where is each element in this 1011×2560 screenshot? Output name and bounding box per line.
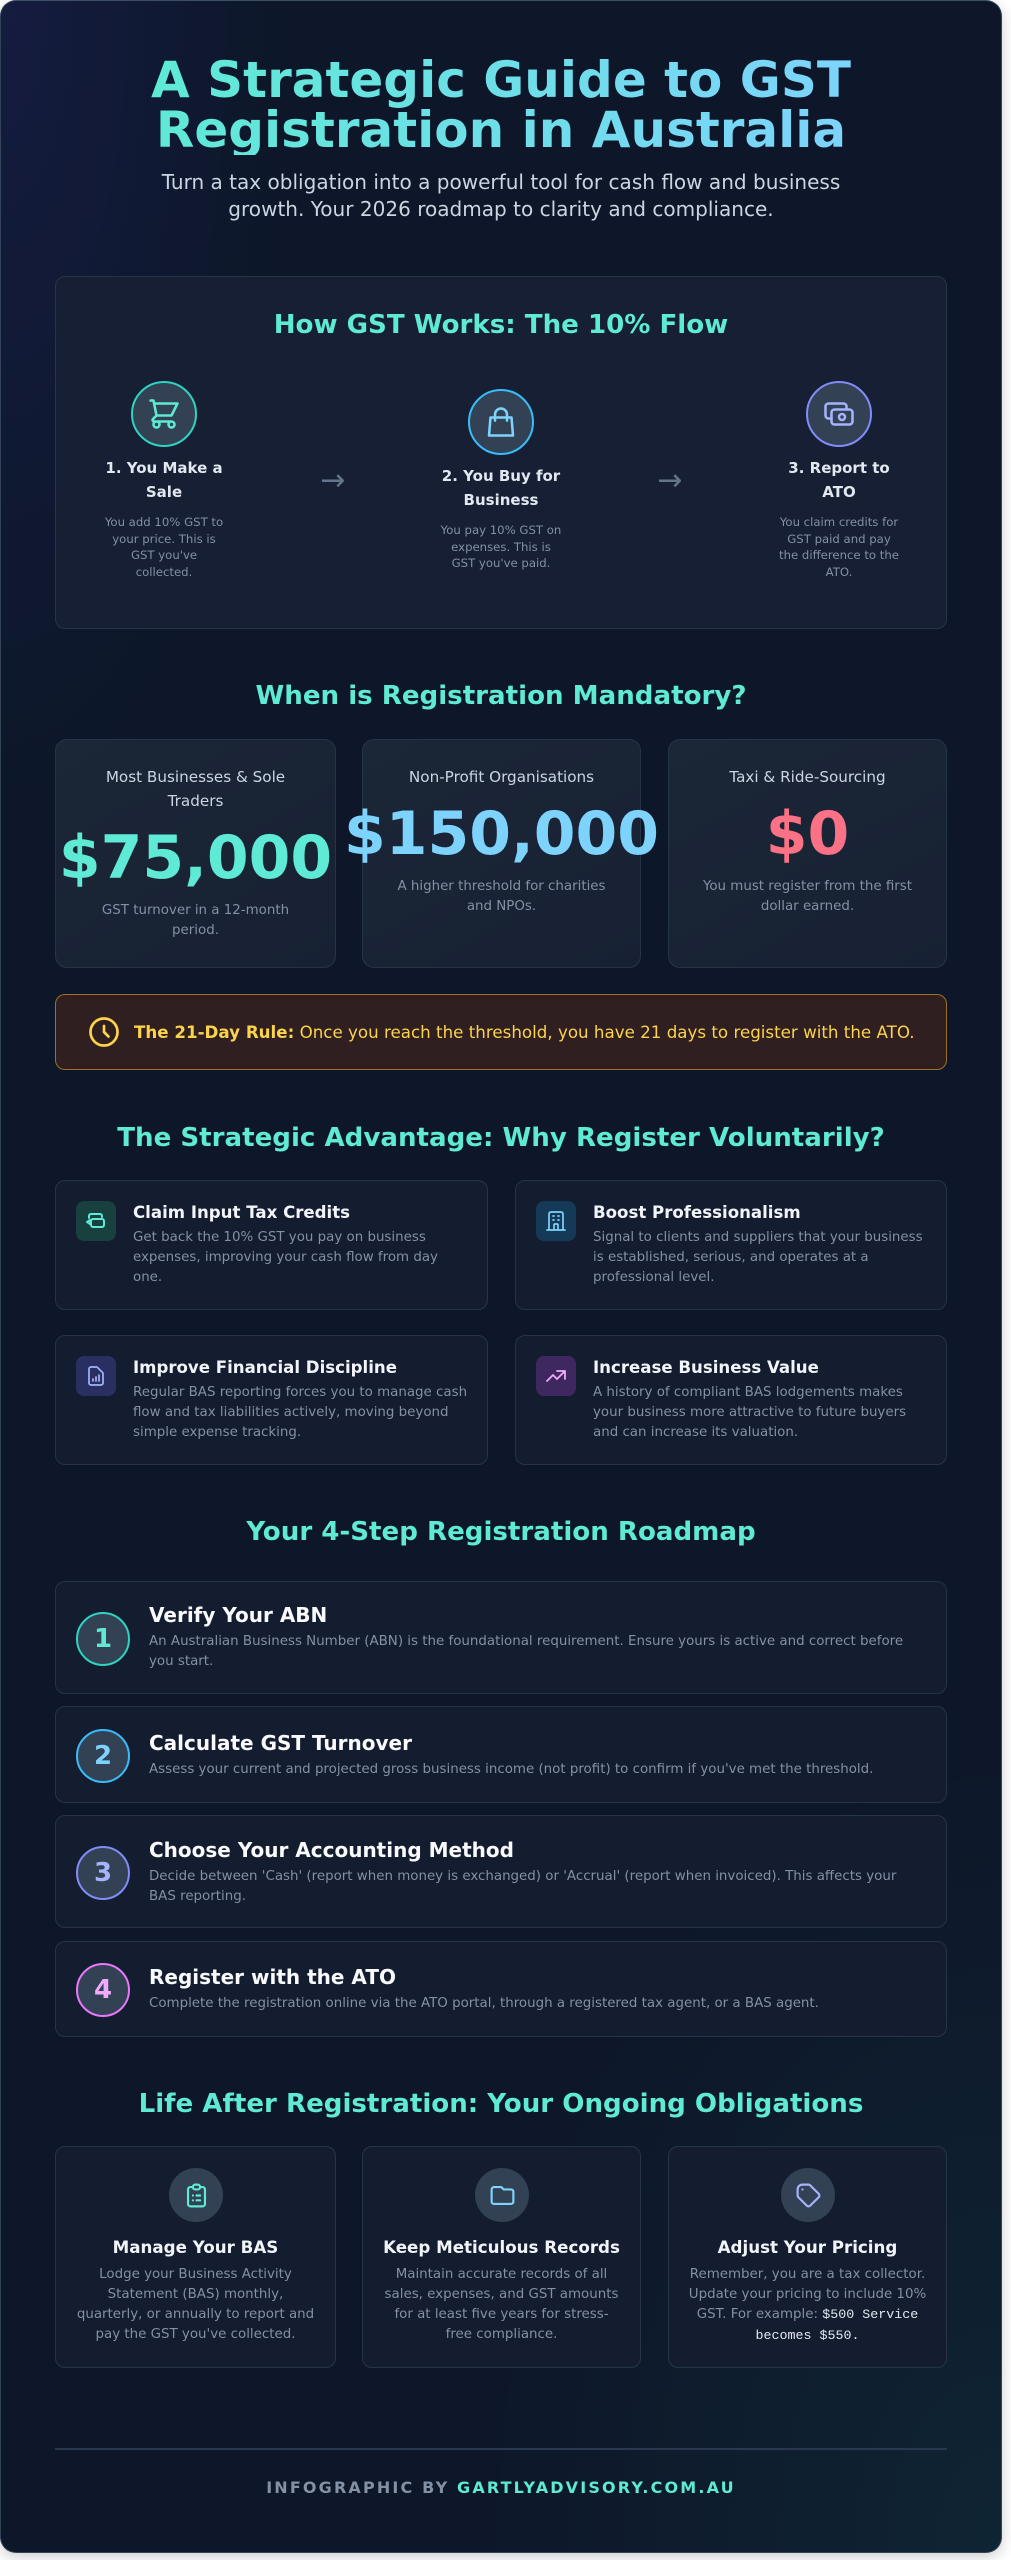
description: dollar earned. xyxy=(761,899,854,914)
roadmap step 2 xyxy=(55,1706,947,1803)
title: A Strategic Guide to GST xyxy=(151,51,851,109)
description xyxy=(133,1385,467,1440)
description: professional level. xyxy=(593,1270,714,1285)
step title: Verify Your ABN xyxy=(149,1603,327,1627)
description: flow and tax liabilities actively, moving beyond xyxy=(133,1405,448,1420)
description xyxy=(593,1230,923,1285)
step description xyxy=(149,1634,903,1669)
icon: clipboard list xyxy=(169,2168,223,2222)
callout: 21-day rule xyxy=(55,994,947,1070)
step description: BAS reporting. xyxy=(149,1889,246,1904)
heading: 4-step roadmap: Your 4-Step Registration Roadmap xyxy=(246,1517,756,1547)
number badge 1: 1 xyxy=(94,1624,112,1654)
icon: cash back xyxy=(76,1201,116,1241)
card: keep meticulous records xyxy=(362,2146,641,2368)
heading: how GST works: How GST Works: The 10% Flow xyxy=(274,310,728,340)
description xyxy=(77,2267,314,2342)
description xyxy=(385,2267,618,2342)
icon: document report xyxy=(76,1356,116,1396)
heading: when is registration mandatory: When is Registration Mandatory? xyxy=(255,681,747,711)
card: adjust your pricing xyxy=(668,2146,947,2368)
step title: ATO xyxy=(822,483,856,501)
icon: trending up xyxy=(536,1356,576,1396)
description: sales, expenses, and GST amounts xyxy=(385,2287,618,2302)
heading: strategic advantage: The Strategic Advantage: Why Register Voluntarily? xyxy=(117,1123,885,1153)
description: Signal to clients and suppliers that your business xyxy=(593,1230,923,1245)
number badge 4 xyxy=(76,1963,130,2017)
step description: Decide between 'Cash' (report when money is exchanged) or 'Accrual' (report when invoiced). This affects your xyxy=(149,1869,896,1884)
threshold value: $75,000 xyxy=(59,823,332,893)
callout text: The 21-Day Rule: Once you reach the threshold, you have 21 days to register with the ATO. xyxy=(134,1022,915,1042)
panel: how GST works xyxy=(55,276,947,629)
label xyxy=(106,768,285,810)
step 1: you make a sale xyxy=(105,381,223,579)
subtitle: growth. Your 2026 roadmap to clarity and compliance. xyxy=(228,197,774,221)
step title: Business xyxy=(464,491,538,509)
icon: office building xyxy=(536,1201,576,1241)
step description: you start. xyxy=(149,1654,213,1669)
icon: folder xyxy=(475,2168,529,2222)
footer: INFOGRAPHIC BY GARTLYADVISORY.COM.AU xyxy=(266,2478,736,2497)
title: Improve Financial Discipline xyxy=(133,1358,397,1377)
card: increase business value xyxy=(515,1335,947,1465)
description: Maintain accurate records of all xyxy=(396,2267,607,2282)
description: expenses, improving your cash flow from day xyxy=(133,1250,438,1265)
heading: ongoing obligations: Life After Registration: Your Ongoing Obligations xyxy=(139,2089,863,2119)
description xyxy=(133,1230,438,1285)
title: Manage Your BAS xyxy=(113,2237,278,2257)
description: GST. For example: $500 Service xyxy=(697,2307,918,2323)
step title: 2. You Buy for xyxy=(442,467,560,485)
step description: Complete the registration online via the ATO portal, through a registered tax agent, or a BAS agent. xyxy=(149,1996,819,2011)
subtitle: Turn a tax obligation into a powerful tool for cash flow and business xyxy=(162,170,840,194)
description: one. xyxy=(133,1270,162,1285)
label: Traders xyxy=(168,792,223,810)
step description xyxy=(440,523,561,570)
icon: clock xyxy=(89,1017,119,1047)
description: pay the GST you've collected. xyxy=(96,2327,295,2342)
number badge 3: 3 xyxy=(94,1858,112,1888)
card: claim input tax credits xyxy=(55,1180,488,1310)
description xyxy=(689,2267,926,2344)
step description xyxy=(105,515,223,579)
icon: shopping bag xyxy=(468,389,534,455)
description: becomes $550. xyxy=(756,2329,859,2344)
arrow: step 1 to step 2: → xyxy=(320,463,346,498)
description xyxy=(397,879,606,914)
description: GST turnover in a 12-month xyxy=(102,903,289,918)
card: most businesses xyxy=(55,739,336,968)
description: A history of compliant BAS lodgements makes xyxy=(593,1385,903,1400)
description: free compliance. xyxy=(446,2327,557,2342)
step description: the difference to the xyxy=(779,548,899,562)
title: Registration in Australia xyxy=(156,101,846,159)
roadmap step 1 xyxy=(55,1581,947,1694)
step title: 3. Report to xyxy=(788,459,890,477)
step title: Calculate GST Turnover xyxy=(149,1731,412,1755)
description: and can increase its valuation. xyxy=(593,1425,798,1440)
description: Lodge your Business Activity xyxy=(99,2267,292,2282)
title: Keep Meticulous Records xyxy=(383,2237,620,2257)
description: and NPOs. xyxy=(467,899,536,914)
step description: GST you've paid. xyxy=(452,556,550,570)
step description: You pay 10% GST on xyxy=(441,523,561,537)
step 2: you buy for business xyxy=(440,389,561,570)
step description xyxy=(779,515,899,579)
step description: Assess your current and projected gross business income (not profit) to confirm if you've met the threshold. xyxy=(149,1762,873,1777)
number badge 2 xyxy=(76,1729,130,1783)
step description: GST paid and pay xyxy=(787,532,891,546)
title: Increase Business Value xyxy=(593,1358,819,1377)
description: You must register from the first xyxy=(703,879,912,894)
description: A higher threshold for charities xyxy=(397,879,606,894)
description: Get back the 10% GST you pay on business xyxy=(133,1230,426,1245)
description xyxy=(102,903,289,938)
description: quarterly, or annually to report and xyxy=(77,2307,314,2322)
icon: shopping cart xyxy=(131,381,197,447)
arrow: step 2 to step 3: → xyxy=(657,463,683,498)
description xyxy=(593,1385,906,1440)
description: Statement (BAS) monthly, xyxy=(108,2287,283,2302)
threshold value: $0 xyxy=(766,799,849,869)
card: manage your BAS xyxy=(55,2146,336,2368)
description: period. xyxy=(172,923,219,938)
step 3: report to ATO xyxy=(779,381,899,579)
step description: GST you've xyxy=(131,548,197,562)
description: your business more attractive to future buyers xyxy=(593,1405,906,1420)
step description xyxy=(149,1869,896,1904)
step description: collected. xyxy=(136,565,192,579)
roadmap step 3 xyxy=(55,1815,947,1928)
number badge 3 xyxy=(76,1846,130,1900)
step description: expenses. This is xyxy=(451,540,551,554)
description: Update your pricing to include 10% xyxy=(689,2287,926,2302)
step title xyxy=(105,459,223,501)
card: taxi and ride-sourcing xyxy=(668,739,947,968)
title: Adjust Your Pricing xyxy=(718,2237,897,2257)
icon: banknotes xyxy=(806,381,872,447)
card: improve financial discipline xyxy=(55,1335,488,1465)
icon: price tag xyxy=(781,2168,835,2222)
step description: You claim credits for xyxy=(780,515,898,529)
label: Non-Profit Organisations xyxy=(409,768,594,786)
number badge 1 xyxy=(76,1612,130,1666)
label: Most Businesses & Sole xyxy=(106,768,285,786)
description: for at least five years for stress- xyxy=(394,2307,609,2322)
step title xyxy=(442,467,560,509)
description xyxy=(703,879,912,914)
card: boost professionalism xyxy=(515,1180,947,1310)
description: simple expense tracking. xyxy=(133,1425,301,1440)
title xyxy=(1,55,1001,155)
step title: Choose Your Accounting Method xyxy=(149,1838,514,1862)
label: Taxi & Ride-Sourcing xyxy=(729,768,886,786)
subtitle xyxy=(162,170,840,221)
step description: your price. This is xyxy=(112,532,216,546)
description: Regular BAS reporting forces you to manage cash xyxy=(133,1385,467,1400)
step description: You add 10% GST to xyxy=(105,515,223,529)
number badge 2: 2 xyxy=(94,1741,112,1771)
roadmap step 4 xyxy=(55,1941,947,2037)
step title: 1. You Make a xyxy=(105,459,223,477)
title: Claim Input Tax Credits xyxy=(133,1203,350,1222)
step title xyxy=(788,459,890,501)
description: Remember, you are a tax collector. xyxy=(690,2267,925,2282)
step description: ATO. xyxy=(826,565,852,579)
step title: Register with the ATO xyxy=(149,1965,396,1989)
step title: Sale xyxy=(146,483,182,501)
description: is established, serious, and operates at a xyxy=(593,1250,869,1265)
number badge 4: 4 xyxy=(94,1975,112,2005)
card: non-profit organisations xyxy=(362,739,641,968)
step description: An Australian Business Number (ABN) is the foundational requirement. Ensure yours is active and correct before xyxy=(149,1634,903,1649)
threshold value: $150,000 xyxy=(344,799,659,869)
title: Boost Professionalism xyxy=(593,1203,801,1222)
